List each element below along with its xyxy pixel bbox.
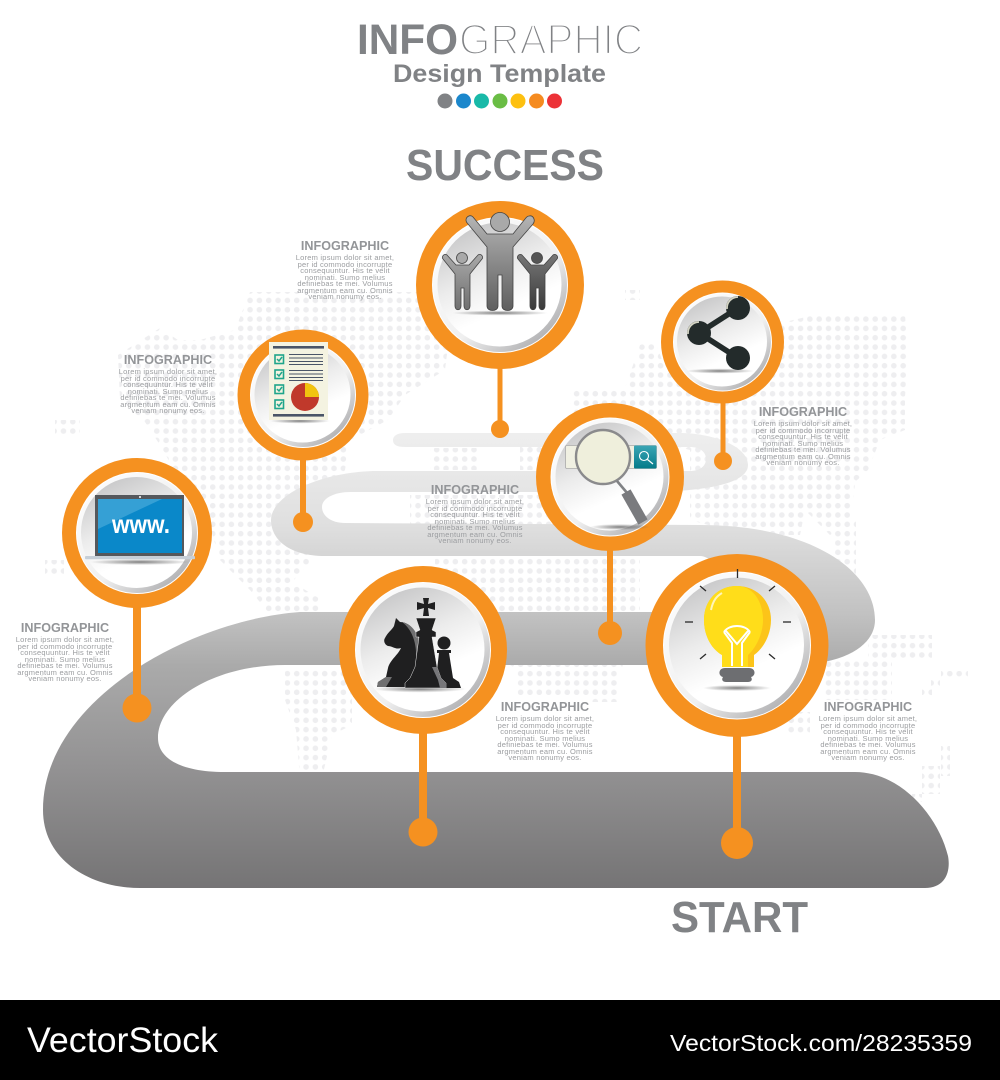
- text block: left: per id commodo incorrupte: [18, 642, 112, 651]
- text block: lower centre: nominati. Sumo melius: [505, 734, 585, 743]
- text block: lower right: INFOGRAPHIC: [824, 700, 912, 714]
- text block: upper left: argmentum eam cu. Omnis: [120, 400, 216, 409]
- text block: centre on road: INFOGRAPHIC: [431, 483, 519, 497]
- text block: left: consequuntur. His te velit: [20, 648, 110, 657]
- text block: top centre: definiebas te mei. Volumus: [297, 279, 393, 288]
- text block: left: definiebas te mei. Volumus: [17, 661, 113, 670]
- subtitle: Design Template: Design Template: [393, 60, 606, 88]
- text block: upper right: Lorem ipsum dolor sit amet,: [754, 419, 852, 428]
- text block: upper right: consequuntur. His te velit: [758, 432, 848, 441]
- text block: upper left: definiebas te mei. Volumus: [120, 393, 216, 402]
- text block: top centre: INFOGRAPHIC: [301, 239, 389, 253]
- text block: upper left: per id commodo incorrupte: [121, 374, 215, 383]
- text block: lower centre: [496, 700, 594, 762]
- dotted world map background: [45, 290, 968, 802]
- text block: centre on road: nominati. Sumo melius: [435, 517, 515, 526]
- text block: lower centre: definiebas te mei. Volumus: [497, 740, 593, 749]
- text block: centre on road: [426, 483, 524, 545]
- text block: lower centre: veniam nonumy eos.: [508, 753, 582, 762]
- text block: upper left: nominati. Sumo melius: [128, 387, 208, 396]
- text block: upper right: nominati. Sumo melius: [763, 439, 843, 448]
- text block: upper right: definiebas te mei. Volumus: [755, 445, 851, 454]
- text block: lower right: [819, 700, 917, 762]
- text block: top centre: consequuntur. His te velit: [300, 266, 390, 275]
- text block: lower right: argmentum eam cu. Omnis: [820, 747, 916, 756]
- text block: left: argmentum eam cu. Omnis: [17, 668, 113, 677]
- text block: centre on road: definiebas te mei. Volumus: [427, 523, 523, 532]
- text block: lower centre: Lorem ipsum dolor sit amet,: [496, 714, 594, 723]
- icon: laptop showing www: www.: [111, 509, 170, 539]
- text block: centre on road: per id commodo incorrupte: [428, 504, 522, 513]
- text block: lower centre: consequuntur. His te velit: [500, 727, 590, 736]
- text block: lower centre: per id commodo incorrupte: [498, 721, 592, 730]
- text block: left: veniam nonumy eos.: [28, 674, 102, 683]
- text block: top centre: argmentum eam cu. Omnis: [297, 286, 393, 295]
- text block: upper right: argmentum eam cu. Omnis: [755, 452, 851, 461]
- text block: centre on road: veniam nonumy eos.: [438, 536, 512, 545]
- icon: document with checkboxes and pie chart: [269, 342, 330, 424]
- text block: lower right: veniam nonumy eos.: [831, 753, 905, 762]
- text block: upper left: veniam nonumy eos.: [131, 406, 205, 415]
- text block: top centre: veniam nonumy eos.: [308, 292, 382, 301]
- text block: left: INFOGRAPHIC: [21, 621, 109, 635]
- text block: upper left: Lorem ipsum dolor sit amet,: [119, 367, 217, 376]
- heading: SUCCESS: SUCCESS: [406, 141, 604, 190]
- marker: idea (light bulb): [646, 554, 828, 859]
- text block: left: Lorem ipsum dolor sit amet,: [16, 635, 114, 644]
- text block: lower right: Lorem ipsum dolor sit amet,: [819, 714, 917, 723]
- title: INFOGRAPHIC: INFO: [357, 16, 458, 64]
- marker: website: [62, 458, 212, 722]
- text block: top centre: nominati. Sumo melius: [305, 273, 385, 282]
- text block: upper right: per id commodo incorrupte: [756, 426, 850, 435]
- winding road from START to SUCCESS: [43, 433, 949, 888]
- title: INFOGRAPHIC: GRAPHIC: [459, 16, 643, 64]
- text block: left: nominati. Sumo melius: [25, 655, 105, 664]
- text block: upper right: INFOGRAPHIC: [759, 405, 847, 419]
- icon: laptop showing www: [85, 495, 195, 565]
- icon: magnifying glass over search bar: [566, 430, 656, 530]
- text block: lower centre: argmentum eam cu. Omnis: [497, 747, 593, 756]
- title: INFOGRAPHIC: [357, 16, 643, 64]
- marker: checklist report: [238, 330, 368, 532]
- marker: share: [661, 280, 784, 470]
- text block: upper left: consequuntur. His te velit: [123, 380, 213, 389]
- footer bar: VectorStock: [27, 1021, 219, 1060]
- icon: share nodes: [686, 296, 754, 374]
- text block: left: [16, 621, 114, 683]
- heading: START: START: [671, 893, 808, 942]
- icon: three people raising arms: [442, 212, 558, 316]
- marker: leadership (people): [416, 201, 584, 438]
- text block: upper left: [119, 353, 217, 415]
- text block: lower centre: INFOGRAPHIC: [501, 700, 589, 714]
- text block: lower right: consequuntur. His te velit: [823, 727, 913, 736]
- text block: top centre: [296, 239, 394, 301]
- text block: top centre: Lorem ipsum dolor sit amet,: [296, 253, 394, 262]
- text block: lower right: nominati. Sumo melius: [828, 734, 908, 743]
- text block: centre on road: Lorem ipsum dolor sit amet,: [426, 497, 524, 506]
- colour dots row: [438, 94, 562, 108]
- text block: upper left: INFOGRAPHIC: [124, 353, 212, 367]
- icon: light bulb with rays: [685, 569, 791, 691]
- text block: lower right: definiebas te mei. Volumus: [820, 740, 916, 749]
- footer bar: [0, 1000, 1000, 1080]
- text block: upper right: veniam nonumy eos.: [766, 458, 840, 467]
- icon: chess knight, king and pawn: [374, 598, 466, 692]
- text block: centre on road: consequuntur. His te velit: [430, 510, 520, 519]
- footer bar: VectorStock.com/28235359: [670, 1030, 972, 1056]
- text block: lower right: per id commodo incorrupte: [821, 721, 915, 730]
- text block: top centre: per id commodo incorrupte: [298, 260, 392, 269]
- marker: search: [536, 403, 684, 645]
- text block: upper right: [754, 405, 852, 467]
- text block: centre on road: argmentum eam cu. Omnis: [427, 530, 523, 539]
- marker: strategy (chess): [339, 566, 507, 846]
